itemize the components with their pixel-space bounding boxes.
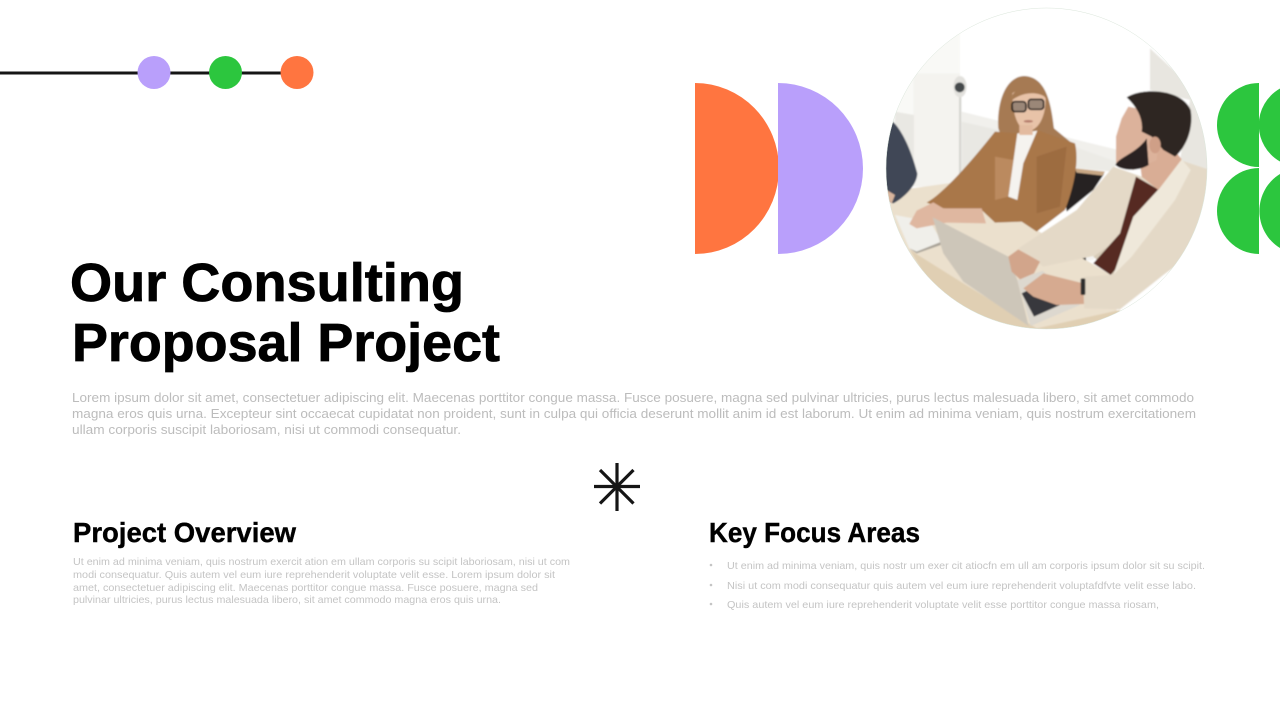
- table: [890, 183, 1118, 328]
- key focus bullet list: Quis autem vel eum iure reprehenderit voluptate velit esse porttitor congue massa riosam,: [727, 599, 1159, 611]
- dot: purple: [138, 56, 170, 89]
- woman glasses: [1012, 99, 1044, 112]
- man neck and face: [1140, 146, 1182, 190]
- key focus bullet list: Nisi ut com modi consequatur quis autem vel eum iure reprehenderit voluptafdfvte velit esse labo.: [727, 580, 1196, 592]
- icon: asterisk: [594, 463, 640, 511]
- intro paragraph: ullam corporis suscipit laboriosam, nisi ut commodi consequatur.: [72, 422, 461, 437]
- man hair: [1127, 91, 1191, 157]
- heading: key focus areas: Key Focus Areas: [709, 517, 920, 548]
- intro paragraph: [72, 390, 1196, 437]
- project overview text: amet, consectetuer adipiscing elit. Maecenas porttitor congue massa. Fusce posuere, magna sed: [73, 582, 538, 594]
- left person: [886, 121, 918, 204]
- project overview text: Ut enim ad minima veniam, quis nostrum exercit ation em ullam corporis su scipit laboriosam, nisi ut com: [73, 556, 570, 568]
- man shirt: [1093, 177, 1159, 275]
- heading: project overview: Project Overview: [73, 517, 296, 548]
- man jacket: [1042, 162, 1207, 310]
- title: [70, 253, 500, 373]
- title: Proposal Project: [72, 313, 500, 373]
- dot: green: [209, 56, 242, 89]
- man beard: [1115, 138, 1149, 170]
- wall: [910, 75, 1188, 272]
- project overview text: pulvinar ultricies, purus lectus malesuada libero, sit amet commodo magna eros quis urna.: [73, 594, 501, 606]
- intro paragraph: magna eros quis urna. Excepteur sint occaecat cupidatat non proident, sunt in culpa qui officia deserunt mollit anim id est laborum. Ut enim ad minima veniam, quis nostrum exercitationem: [72, 406, 1196, 421]
- key focus bullet list: Ut enim ad minima veniam, quis nostr um exer cit atiocfn em ull am corporis ipsum dolor sit su scipit.: [727, 560, 1205, 572]
- decorative green half circles: [1217, 83, 1280, 254]
- intro paragraph: Lorem ipsum dolor sit amet, consectetuer adipiscing elit. Maecenas porttitor congue massa. Fusce posuere, magna sed pulvinar ultricies, purus lectus malesuada libero, sit amet commodo: [72, 390, 1194, 405]
- timeline with three dots: [0, 56, 314, 89]
- man hands: [1008, 249, 1040, 279]
- man lapel: [1113, 159, 1191, 275]
- big laptop: [933, 217, 1029, 326]
- small laptop: [895, 215, 942, 252]
- chair: [1065, 169, 1104, 212]
- title: Our Consulting: [70, 253, 464, 313]
- woman hands: [909, 202, 986, 228]
- key focus bullet list: [710, 560, 1205, 611]
- circular photo: team meeting at a laptop: [886, 34, 1207, 329]
- woman jacket: [927, 130, 1077, 232]
- woman hair back: [997, 75, 1070, 142]
- woman face: [1012, 90, 1046, 131]
- photo thin outline: [886, 8, 1207, 329]
- decorative orange and purple half circles: [695, 83, 863, 254]
- project overview text: [73, 556, 570, 606]
- woman shirt: [1008, 131, 1037, 200]
- project overview text: modi consequatur. Quis autem vel eum iure reprehenderit voluptate velit esse. Lorem ipsum dolor sit: [73, 569, 555, 581]
- dot: orange: [280, 56, 314, 89]
